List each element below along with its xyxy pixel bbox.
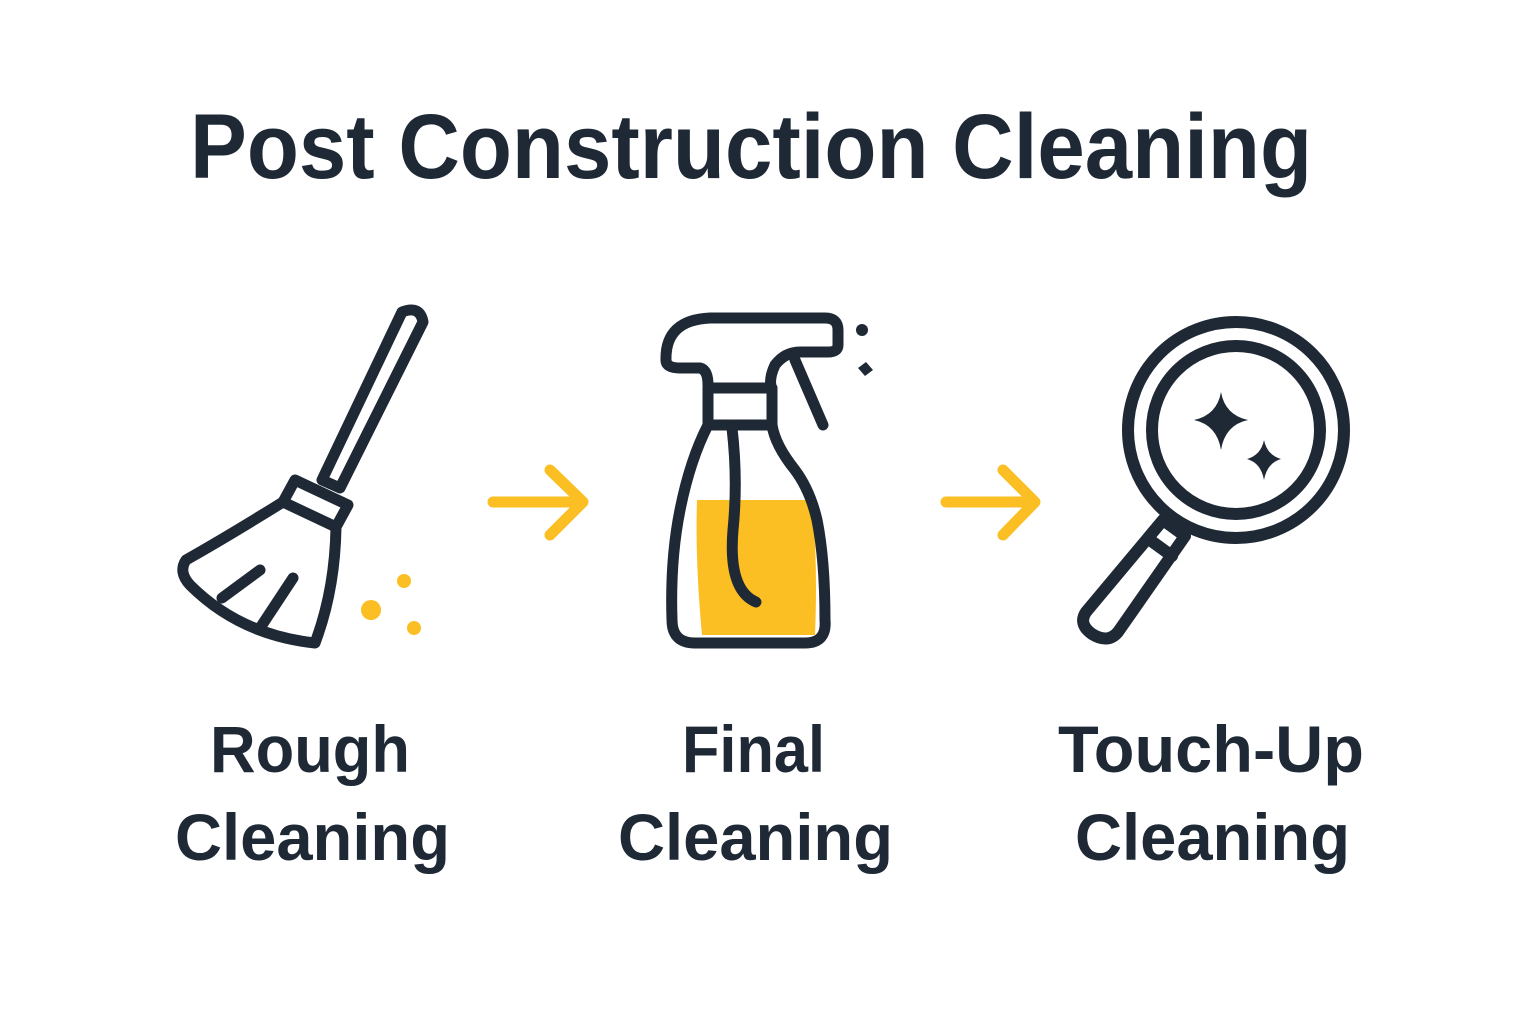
icon: spray bottle (666, 318, 873, 643)
icon: dust dots (361, 574, 421, 635)
arrow 2 (946, 470, 1035, 535)
label: final cleaning: Final (682, 712, 825, 786)
label: final cleaning (618, 712, 893, 874)
label: rough cleaning: Rough (210, 712, 410, 786)
label: rough cleaning: Cleaning (175, 800, 450, 874)
icon: magnifier (1083, 322, 1344, 639)
label: touch-up cleaning (1058, 712, 1364, 874)
label: rough cleaning (175, 712, 450, 874)
label: touch-up cleaning: Cleaning (1075, 800, 1350, 874)
arrow 1 (493, 470, 583, 535)
title: Post Construction Cleaning (190, 96, 1312, 198)
label: final cleaning: Cleaning (618, 800, 893, 874)
icon: broom (183, 310, 423, 643)
label: touch-up cleaning: Touch-Up (1058, 712, 1364, 786)
